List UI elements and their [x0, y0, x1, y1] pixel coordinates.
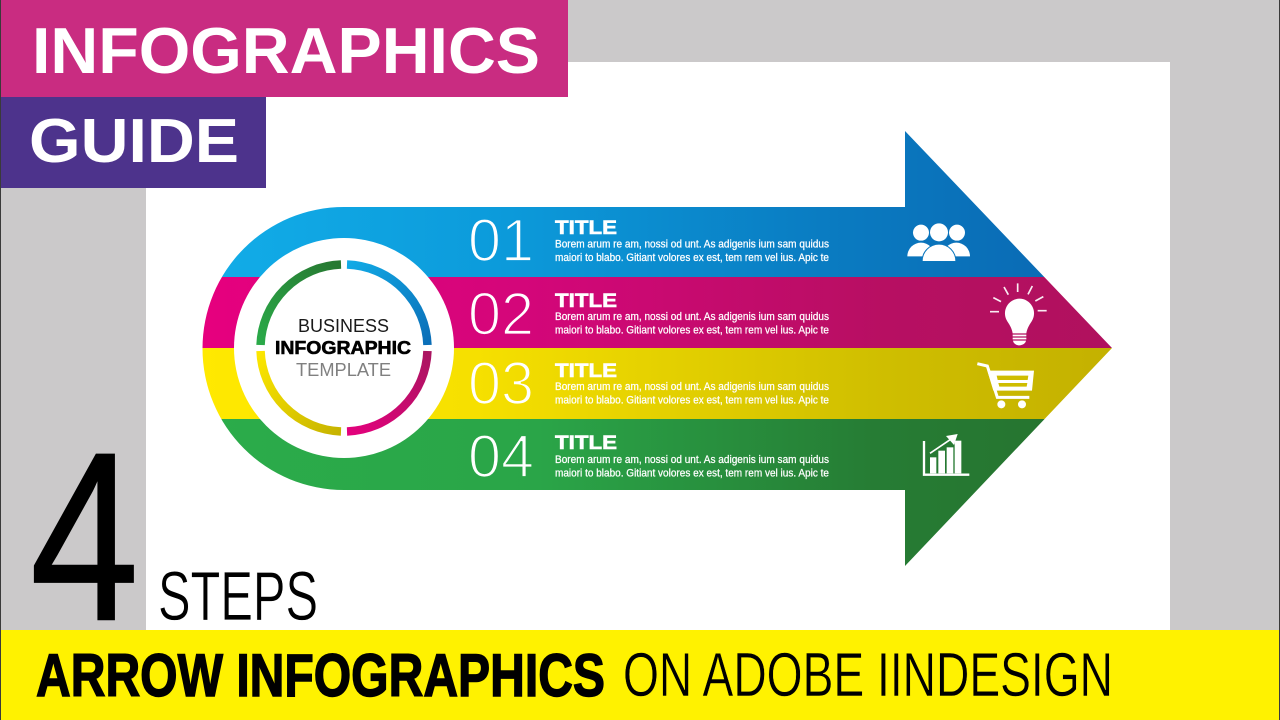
bottom banner: [1, 630, 1279, 720]
body 2: Borem arum re am, nossi od unt. As adigenis ium sam quidus: [555, 311, 829, 323]
number 04: 04: [468, 423, 534, 490]
band 4 green: [221, 419, 1044, 566]
header banner: guide: [1, 97, 266, 188]
heading guide: GUIDE: [29, 107, 239, 176]
title 3: TITLE: [555, 360, 617, 382]
body 4: Borem arum re am, nossi od unt. As adigenis ium sam quidus: [555, 454, 829, 466]
big number 4: 4: [30, 402, 139, 670]
number 03: 03: [468, 350, 534, 417]
icon: light bulb: [990, 283, 1047, 345]
ring segment magenta: [347, 351, 427, 431]
center label business: BUSINESS: [298, 316, 389, 336]
arrow infographic: [200, 130, 1120, 567]
white disc: [234, 238, 454, 458]
step 3 text: [468, 350, 829, 417]
title 2: TITLE: [555, 290, 617, 312]
white page: [146, 62, 1170, 630]
icon: people: [907, 223, 970, 261]
header banner: infographics: [1, 0, 568, 97]
center circle: [234, 238, 454, 458]
band 1 blue: [222, 131, 1044, 277]
step 1 text: [468, 207, 829, 274]
ring segment green: [261, 265, 341, 345]
pink banner: [1, 0, 568, 97]
number 02: 02: [468, 280, 534, 348]
body 4: [555, 454, 829, 480]
icon: growth chart: [924, 434, 969, 475]
body 1: Borem arum re am, nossi od unt. As adigenis ium sam quidus: [555, 238, 829, 250]
band 2 magenta: [200, 277, 1120, 348]
arrow bands: [200, 130, 1120, 567]
body 2: [555, 311, 829, 336]
yellow strip: [1, 630, 1279, 720]
body 1: maiori to blabo. Gitiant volores ex est, tem rem vel ius. Apic te: [555, 252, 829, 264]
bottom title bold: ARROW INFOGRAPHICS: [36, 642, 605, 709]
body 3: [555, 381, 829, 406]
body 4: maiori to blabo. Gitiant volores ex est, tem rem vel ius. Apic te: [555, 468, 829, 480]
title 1: TITLE: [555, 217, 617, 239]
purple banner: [1, 97, 266, 188]
body 2: maiori to blabo. Gitiant volores ex est, tem rem vel ius. Apic te: [555, 324, 829, 336]
body 3: maiori to blabo. Gitiant volores ex est, tem rem vel ius. Apic te: [555, 394, 829, 406]
label steps: STEPS: [158, 557, 318, 635]
step 4 text: [468, 423, 829, 490]
center label infographic: INFOGRAPHIC: [275, 338, 411, 358]
number 01: 01: [468, 207, 534, 274]
body 3: Borem arum re am, nossi od unt. As adigenis ium sam quidus: [555, 381, 829, 393]
band 3 yellow: [200, 348, 1120, 419]
ring segment blue: [347, 265, 427, 345]
center label template: TEMPLATE: [296, 360, 391, 380]
icon: shopping cart: [977, 364, 1034, 408]
bottom title light: ON ADOBE IINDESIGN: [623, 641, 1113, 710]
body 1: [555, 238, 829, 264]
title 4: TITLE: [555, 432, 617, 454]
ring segment yellow: [261, 351, 341, 431]
step 2 text: [468, 280, 829, 348]
heading infographics: INFOGRAPHICS: [32, 14, 540, 87]
